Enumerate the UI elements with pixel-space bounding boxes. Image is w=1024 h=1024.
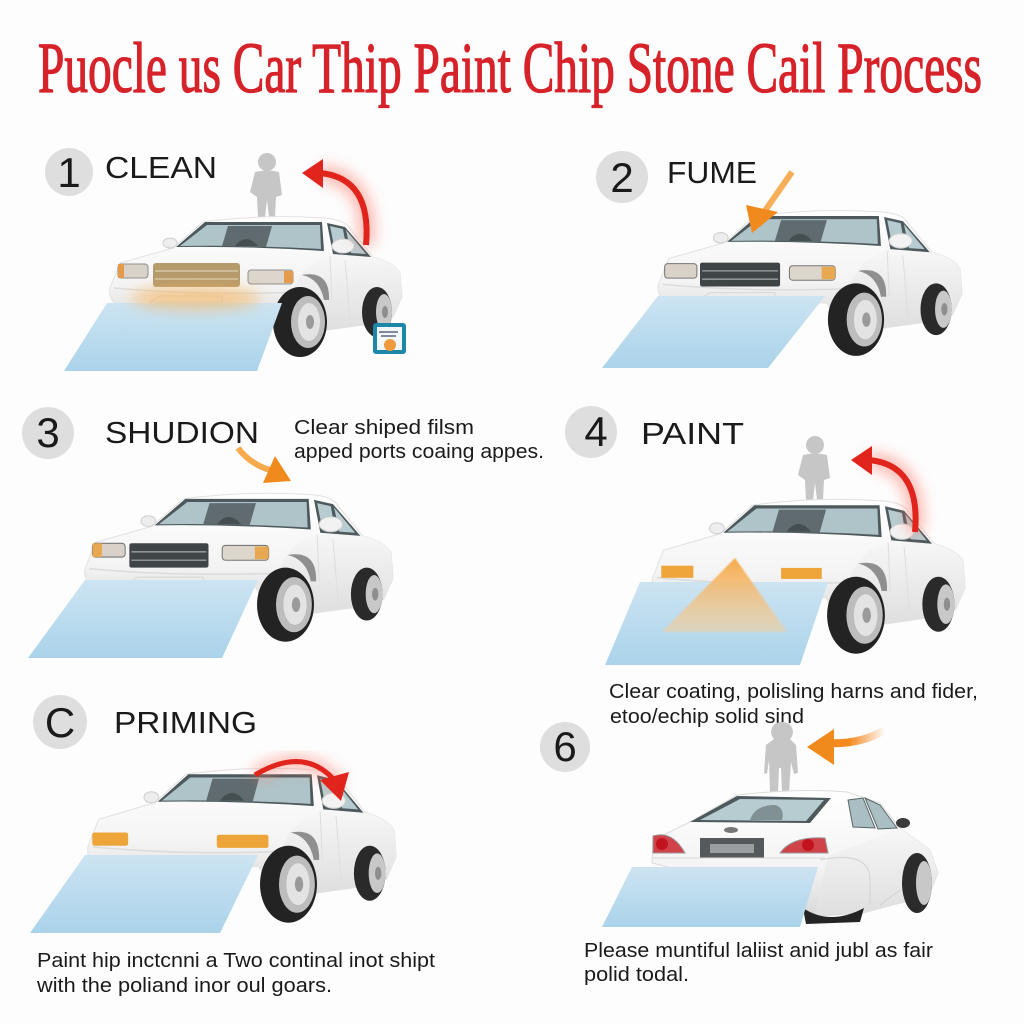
panel: step 4 paint [565, 406, 965, 665]
text block: step 6 description: Please muntiful laliist anid jubl as fair [584, 940, 933, 962]
step number 1: 1 [57, 149, 81, 196]
step number 4 [565, 406, 617, 458]
arrow: red curved [851, 446, 916, 532]
text block: step 6 description [584, 940, 933, 986]
step label C [33, 695, 87, 749]
blue film sheet [605, 582, 828, 665]
step number 6: 6 [553, 723, 577, 770]
car illustration [110, 217, 402, 357]
icon: small badge [373, 323, 406, 354]
step number 3: 3 [36, 409, 60, 456]
blue film sheet [602, 867, 818, 927]
heading: priming: PRIMING [114, 705, 257, 740]
description text: apped ports coaing appes. [294, 441, 544, 463]
icon: person [798, 436, 830, 500]
step number 3 [22, 407, 74, 459]
orange triangle [662, 558, 787, 632]
orange glow on bumper [130, 286, 260, 310]
panel: step 1 clean [45, 148, 406, 371]
rear car illustration [652, 791, 938, 924]
arrow: orange [746, 172, 792, 233]
step number 2 [596, 151, 648, 203]
text block: step 5 description [36, 950, 435, 997]
icon: person [764, 722, 798, 792]
text block: step 6 description: polid todal. [584, 964, 689, 986]
text block: step 5 description: with the poliand inor oul goars. [36, 975, 332, 997]
step label C: C [45, 699, 75, 746]
panel: step 3 shudion [22, 407, 544, 658]
blue film sheet [30, 855, 258, 933]
car illustration [658, 210, 962, 356]
arrow: red curved [255, 762, 349, 801]
text block: step 5 description: Paint hip inctcnni a Two continal inot shipt [37, 950, 435, 972]
text block: step 4 description: etoo/echip solid sind [610, 706, 804, 728]
text block: step 4 description: Clear coating, polisling harns and fider, [609, 681, 978, 703]
heading: shudion: SHUDION [105, 415, 259, 450]
blue film sheet [64, 303, 282, 371]
arrow: red curved [302, 159, 367, 245]
icon: person [250, 153, 282, 217]
heading: paint: PAINT [641, 416, 744, 451]
heading: clean: CLEAN [105, 150, 217, 185]
arrow: orange [807, 729, 885, 765]
description text [294, 417, 544, 463]
car illustration [88, 768, 396, 923]
blue film sheet [602, 296, 825, 368]
step number 4: 4 [584, 408, 608, 455]
panel: step 5 priming [30, 695, 396, 933]
description text: Clear shiped filsm [294, 417, 474, 439]
car illustration [85, 493, 393, 642]
step number 1 [45, 148, 93, 196]
panel: step 2 fume [596, 151, 962, 368]
arrow: orange [238, 448, 291, 483]
car illustration [652, 499, 965, 654]
step number 2: 2 [610, 154, 634, 201]
step number 6 [540, 722, 590, 772]
panel: step 6 [540, 722, 938, 927]
text block: step 4 description [609, 681, 978, 728]
blue film sheet [28, 580, 258, 658]
heading: fume: FUME [667, 155, 757, 190]
